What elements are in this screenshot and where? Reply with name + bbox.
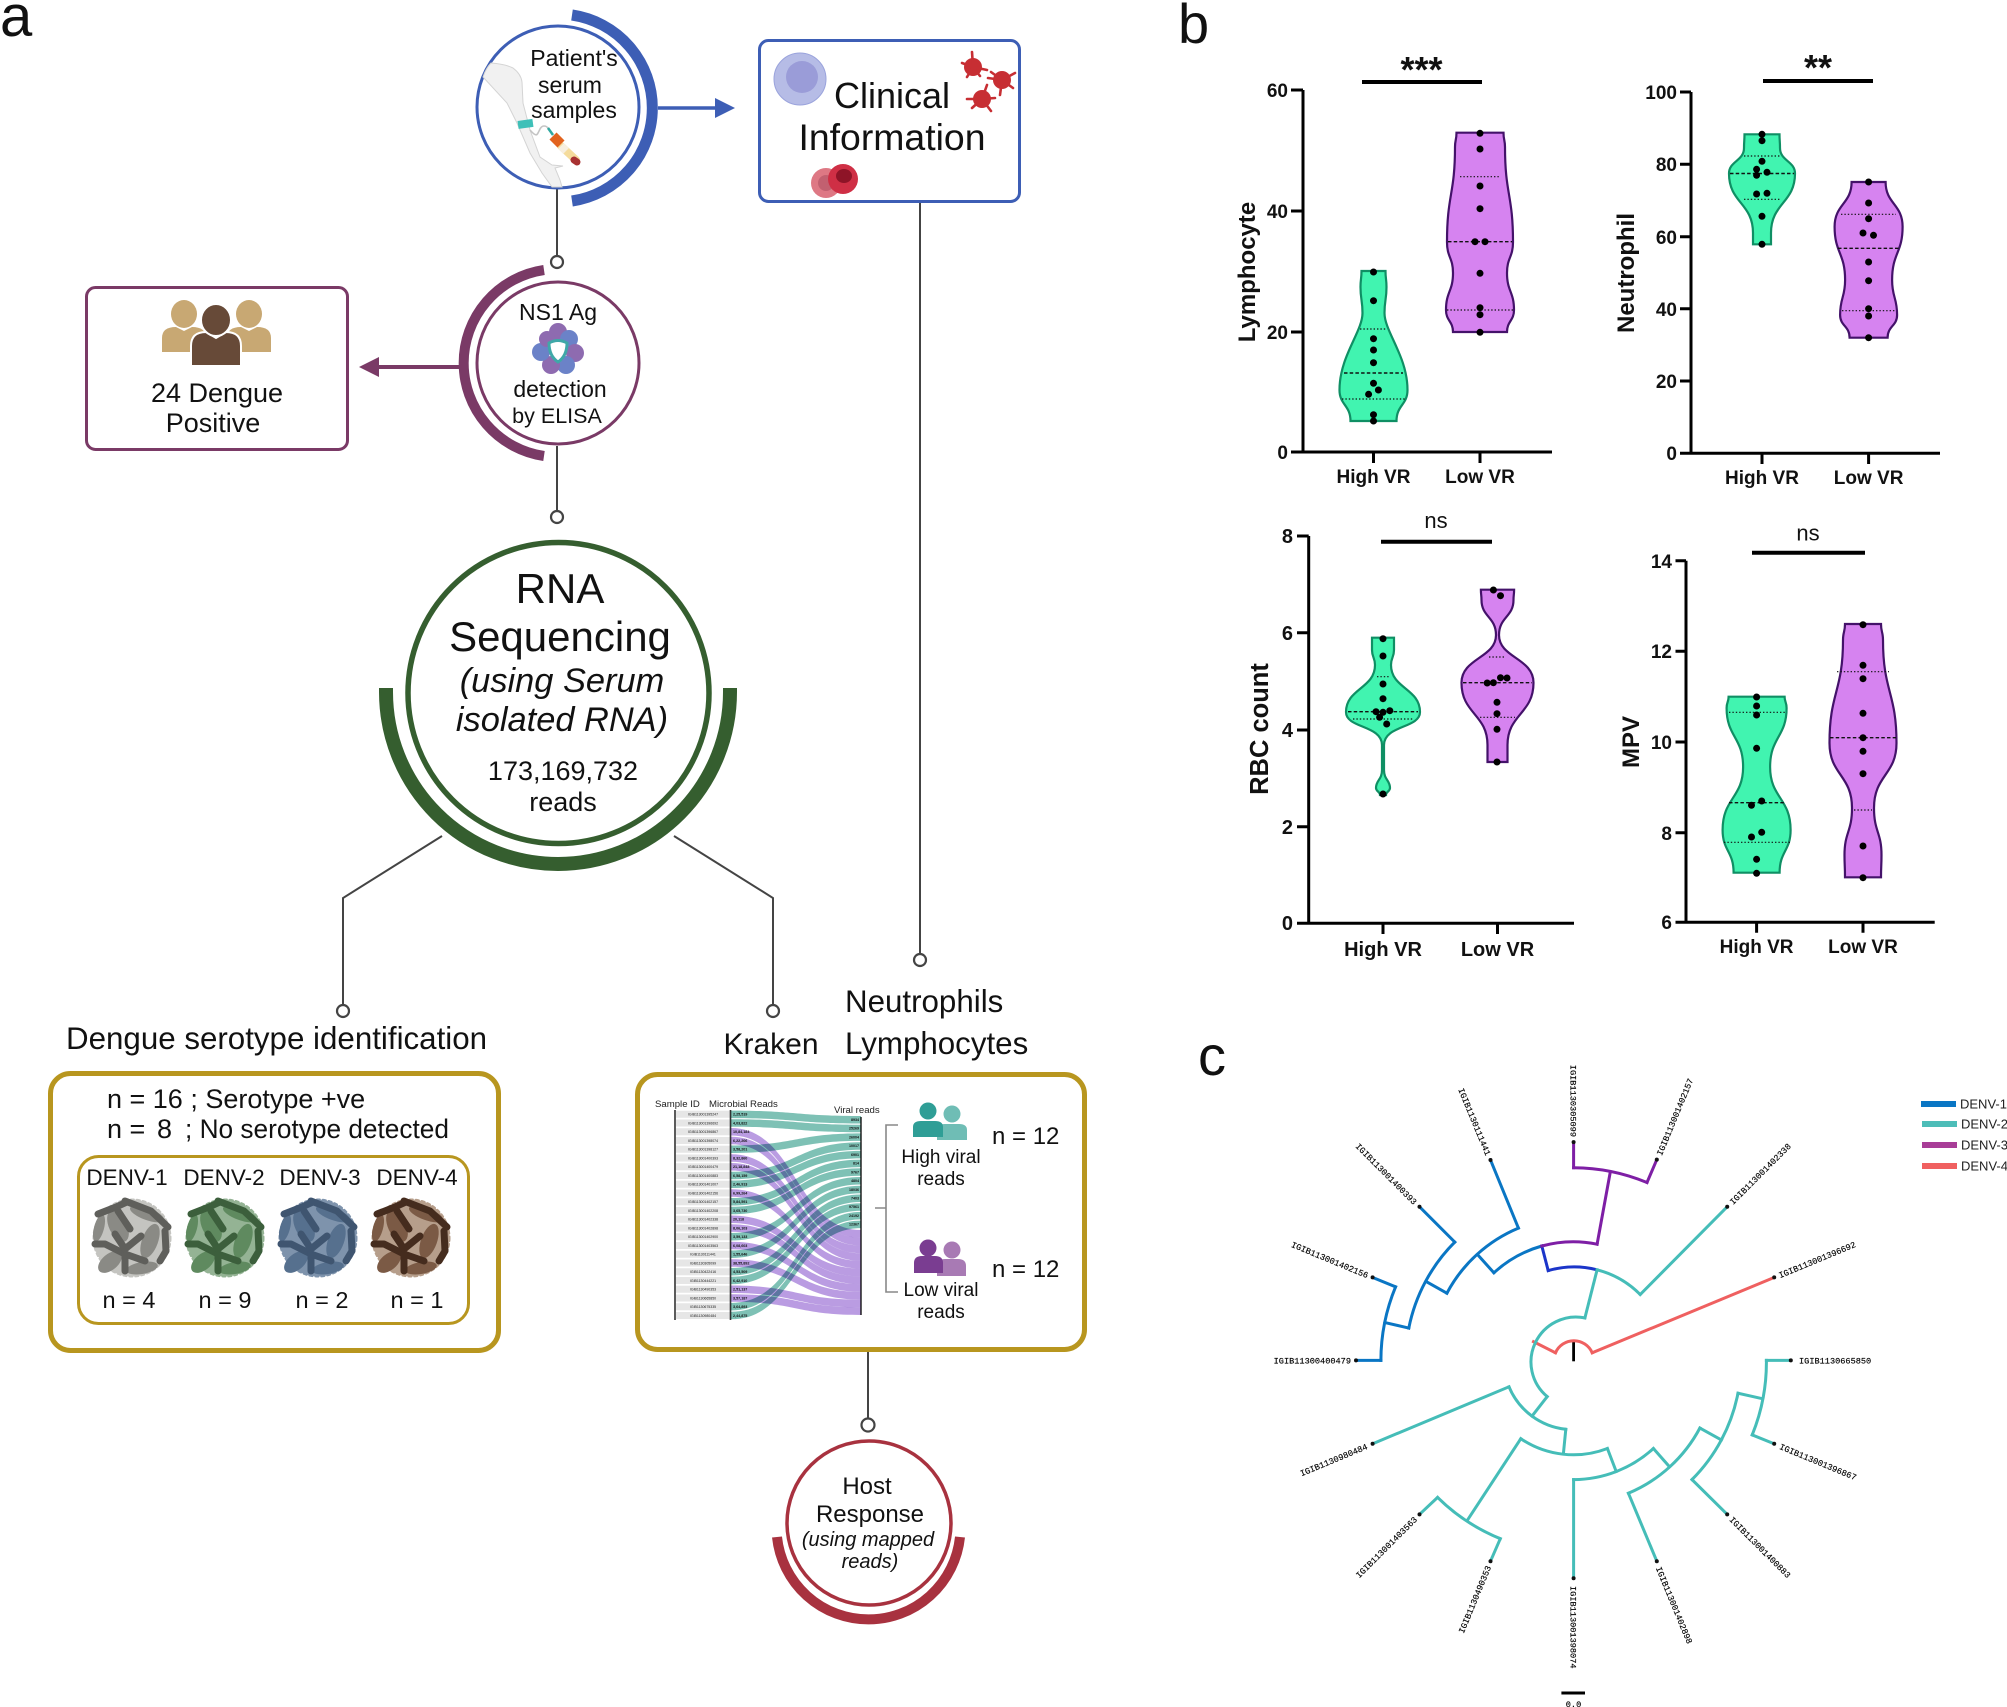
sankey chart: microbial to viral reads: 3,64,893 [733, 1305, 747, 1309]
clade: ancestral blue branches [1542, 1246, 1597, 1271]
clinical information box: Information [798, 116, 986, 158]
tip labels: IGIB1130665850 [1799, 1356, 1871, 1366]
sankey chart: microbial to viral reads: 9767 [851, 1170, 859, 1174]
violin chart: Lymphocyte: 0 [1277, 443, 1288, 464]
patient serum samples node: serum [538, 72, 602, 98]
violin chart: MPV: 6 [1661, 913, 1672, 934]
violin chart: MPV: Low VR [1828, 937, 1898, 958]
RNA sequencing node: isolated RNA) [456, 701, 668, 739]
Kraken panel [638, 1074, 1084, 1350]
sankey chart: microbial to viral reads: IGIB113001402338 [688, 1218, 718, 1222]
serotype panel: n = 16 ; Serotype +ve [107, 1084, 365, 1114]
icon: lymphocyte cell [774, 53, 826, 105]
sankey chart: microbial to viral reads: Viral reads [834, 1105, 880, 1116]
sankey chart: microbial to viral reads: IGIB113001402900 [688, 1235, 718, 1239]
violin chart: RBC count: RBC count [1246, 663, 1274, 795]
sankey chart: microbial to viral reads [655, 1099, 880, 1320]
sankey chart: microbial to viral reads: 2,46,913 [733, 1183, 747, 1187]
violin chart: Neutrophil: High VR [1725, 468, 1799, 489]
scale bar [1561, 1693, 1585, 1707]
icon: low viral reads people [914, 1240, 966, 1276]
violin chart: Neutrophil: 80 [1656, 155, 1677, 176]
sankey chart: microbial to viral reads: 10,84,184 [733, 1130, 750, 1134]
violin chart: Lymphocyte: 40 [1267, 202, 1288, 223]
serotype panel: DENV-3 [279, 1165, 361, 1190]
clade: DENV-3 [1542, 1142, 1657, 1246]
tip labels: IGIB113001398074 [1568, 1586, 1578, 1669]
violin chart: Lymphocyte [1234, 49, 1552, 488]
24 dengue positive box: 24 Dengue [151, 378, 283, 408]
tip labels: IGIB11300400479 [1274, 1356, 1351, 1366]
violin chart: Lymphocyte: 60 [1267, 81, 1288, 102]
sankey chart: microbial to viral reads: IGIB113001396867 [688, 1130, 718, 1134]
sankey chart: microbial to viral reads: IGIB1130444221 [690, 1279, 716, 1283]
sankey chart: microbial to viral reads: 6,42,910 [733, 1279, 747, 1283]
serotype panel: 8 [157, 1114, 172, 1144]
circular phylogenetic tree [1274, 1065, 1871, 1707]
clinical information box [760, 40, 1020, 202]
host response node: Response [816, 1501, 924, 1528]
sankey chart: microbial to viral reads: 18036 [849, 1188, 859, 1192]
serotype panel: ; No serotype detected [185, 1114, 449, 1144]
tip labels: IGIB1130111441 [1455, 1087, 1492, 1157]
sankey chart: microbial to viral reads: 4,53,509 [733, 1270, 747, 1274]
sankey chart: microbial to viral reads: 3,58,201 [733, 1148, 747, 1152]
violin chart: MPV: 10 [1651, 733, 1672, 754]
violin chart: Neutrophil [1613, 47, 1940, 489]
sankey chart: microbial to viral reads: 6,08,603 [733, 1244, 747, 1248]
icon: DENV-2 virion [184, 1200, 264, 1277]
legend: serotypes: DENV-4 [1961, 1158, 2007, 1174]
sankey chart: microbial to viral reads: IGIB113001402157 [688, 1200, 718, 1204]
violin chart: Neutrophil: 20 [1656, 372, 1677, 393]
sankey chart: microbial to viral reads: IGIB113001400883 [688, 1174, 718, 1178]
sankey chart: microbial to viral reads: IGIB113001400393 [688, 1156, 718, 1160]
Kraken panel: reads [917, 1169, 965, 1190]
tip labels: IGIB1130490353 [1457, 1564, 1494, 1635]
Kraken panel: Low viral [904, 1280, 978, 1301]
violin chart: MPV: 12 [1651, 642, 1672, 663]
sankey chart: microbial to viral reads: IGIB113001398074 [688, 1139, 718, 1143]
sankey chart: microbial to viral reads: IGIB1130422416 [690, 1270, 716, 1274]
connector: clinical information to neutrophils [914, 202, 926, 966]
icon: DENV-1 virion [91, 1200, 170, 1277]
violin chart: Neutrophil: Low VR [1834, 468, 1904, 489]
clade: DENV-2 [1373, 1207, 1791, 1578]
violin chart: RBC count: 8 [1282, 526, 1293, 548]
bracket [875, 1125, 898, 1292]
sankey chart: microbial to viral reads: IGIB1130111441 [690, 1253, 716, 1257]
legend: serotypes [1921, 1096, 2007, 1174]
sankey chart: microbial to viral reads: IGIB113001401007 [688, 1183, 718, 1187]
connector: NS1 to RNA sequencing [551, 446, 563, 523]
sankey chart: microbial to viral reads: 5,84,591 [733, 1200, 747, 1204]
serotype panel: n = 1 [391, 1287, 443, 1313]
sankey chart: microbial to viral reads: IGIB1130305099 [690, 1261, 716, 1265]
icon: arm with blood draw [483, 63, 577, 187]
serotype panel [50, 1074, 498, 1350]
sankey chart: microbial to viral reads: IGIB1130490353 [690, 1288, 716, 1292]
host response node: reads) [842, 1551, 898, 1573]
violin chart: Neutrophil: ** [1804, 47, 1832, 88]
serotype panel: DENV-1 [86, 1165, 168, 1190]
heading: Kraken: Kraken [723, 1028, 819, 1061]
sankey chart: microbial to viral reads: IGIB113001398127 [688, 1148, 718, 1152]
sankey chart: microbial to viral reads: Microbial Reads [709, 1099, 778, 1110]
violin chart: RBC count: High VR [1344, 939, 1422, 961]
clinical information box: Clinical [834, 75, 950, 116]
sankey chart: microbial to viral reads: 8,32,860 [733, 1156, 747, 1160]
sankey chart: microbial to viral reads: IGIB113001403563 [688, 1244, 718, 1248]
violin chart: MPV: 8 [1661, 824, 1672, 845]
sankey chart: microbial to viral reads: 3,65,730 [733, 1209, 747, 1213]
violin chart: RBC count: 0 [1282, 913, 1293, 935]
sankey chart: microbial to viral reads: 8934 [851, 1118, 859, 1122]
tip labels: IGIB113001400883 [1727, 1515, 1792, 1581]
sankey chart: microbial to viral reads: 6,99,264 [733, 1191, 748, 1195]
icon: red blood cells [811, 164, 858, 198]
serotype panel: DENV-2 [183, 1165, 265, 1190]
sankey chart: microbial to viral reads: 6901 [851, 1153, 859, 1157]
RNA sequencing node: RNA [516, 565, 604, 612]
violin chart: RBC count: 6 [1282, 623, 1293, 645]
24 dengue positive box [86, 288, 348, 450]
violin chart: MPV [1618, 521, 1935, 958]
tip labels: IGIB1130980484 [1299, 1442, 1369, 1479]
RNA sequencing node: Sequencing [449, 613, 671, 660]
serotype panel: DENV-4 [376, 1165, 458, 1190]
tip labels: IGIB113001400393 [1353, 1142, 1418, 1207]
tip labels [1274, 1065, 1871, 1669]
sankey chart: microbial to viral reads: 6,22,206 [733, 1139, 747, 1143]
tip labels: IGIB1130305099 [1568, 1065, 1578, 1137]
sankey chart: microbial to viral reads: IGIB113001402208 [688, 1209, 718, 1213]
violin chart: Neutrophil: 0 [1666, 444, 1677, 465]
Kraken panel: reads [917, 1302, 965, 1323]
icon: high viral reads people [913, 1102, 967, 1140]
clade: DENV-4 [1534, 1277, 1774, 1353]
sankey chart: microbial to viral reads: 24192 [849, 1214, 859, 1218]
violin chart: RBC count: Low VR [1461, 939, 1535, 961]
legend: serotypes: DENV-2 [1961, 1116, 2007, 1132]
tip labels: IGIB113001396867 [1778, 1442, 1858, 1483]
sankey chart: microbial to viral reads: 97561 [849, 1205, 859, 1209]
heading: neutrophils lymphocytes: Neutrophils [845, 984, 1003, 1019]
tip labels: IGIB113001402898 [1653, 1565, 1694, 1646]
legend: serotypes: DENV-3 [1961, 1138, 2007, 1152]
NS1 Ag ELISA node [464, 270, 639, 456]
violin chart: MPV: High VR [1720, 937, 1794, 958]
Kraken panel: n = 12 [992, 1123, 1059, 1150]
serotype panel: n = 9 [199, 1287, 251, 1313]
sankey chart: microbial to viral reads: 20,118 [733, 1218, 744, 1222]
24 dengue positive box: Positive [166, 408, 260, 438]
patient serum samples node: samples [531, 97, 617, 123]
Kraken panel: High viral [901, 1147, 981, 1168]
tip labels: IGIB113001403563 [1354, 1515, 1420, 1581]
panel label c: c [1198, 1024, 1226, 1087]
connector: patient to NS1 [551, 189, 563, 268]
violin chart: RBC count: ns [1424, 508, 1448, 533]
icon: people group [162, 300, 271, 366]
sankey chart: microbial to viral reads: 3,59,133 [733, 1235, 747, 1239]
violin chart: MPV: MPV [1618, 716, 1645, 768]
sankey chart: microbial to viral reads: IGIB113001402898 [688, 1226, 718, 1230]
icon: platelets [962, 52, 1015, 111]
violin chart: RBC count [1246, 508, 1574, 961]
tip labels: IGIB113001402338 [1728, 1142, 1794, 1207]
icon: NS1 protein [532, 323, 584, 374]
sankey chart: microbial to viral reads: 8,06,103 [733, 1226, 747, 1230]
sankey chart: microbial to viral reads: IGIB113001396692 [688, 1121, 718, 1125]
sankey chart: microbial to viral reads: IGIB1130980484 [690, 1314, 716, 1318]
serotype panel: n = [107, 1114, 145, 1144]
sankey chart: microbial to viral reads: Sample ID [655, 1099, 700, 1110]
sankey chart: microbial to viral reads: IGIB113001402156 [688, 1191, 718, 1195]
host response node: Host [842, 1473, 892, 1500]
violin chart: Lymphocyte: Low VR [1445, 467, 1515, 488]
heading: dengue serotype identification: Dengue serotype identification [66, 1021, 487, 1056]
sankey chart: microbial to viral reads: 2,51,137 [733, 1288, 747, 1292]
sankey chart: microbial to viral reads: 4,03,822 [733, 1121, 747, 1125]
Kraken panel: n = 12 [992, 1256, 1059, 1283]
RNA sequencing node: reads [529, 787, 597, 817]
tip labels: IGIB113001396692 [1777, 1240, 1858, 1281]
violin chart: RBC count: 2 [1282, 817, 1293, 839]
RNA sequencing node: 173,169,732 [488, 756, 638, 786]
sankey chart: microbial to viral reads: 21,18,848 [733, 1165, 749, 1169]
RNA sequencing node [386, 542, 730, 864]
connector: RNA to serotype [337, 836, 442, 1017]
arrow: NS1 to dengue positive [359, 357, 459, 377]
tip labels: IGIB113001402157 [1655, 1077, 1696, 1157]
sankey chart: microbial to viral reads: 814 [853, 1162, 859, 1166]
tree root [1572, 1340, 1575, 1361]
sankey chart: microbial to viral reads: 4804 [851, 1179, 859, 1183]
violin chart: MPV: 14 [1651, 552, 1672, 573]
NS1 Ag ELISA node: detection [513, 376, 607, 402]
sankey chart: microbial to viral reads: 2,44,875 [733, 1314, 747, 1318]
sankey chart: microbial to viral reads: 38,55,892 [733, 1261, 749, 1265]
serotype panel: n = 4 [103, 1287, 155, 1313]
violin chart: Lymphocyte: 20 [1267, 323, 1288, 344]
clade: DENV-1 [1356, 1160, 1542, 1360]
violin chart: Neutrophil: 100 [1645, 83, 1677, 104]
sankey chart: microbial to viral reads: 7403 [851, 1196, 859, 1200]
NS1 Ag ELISA node: by ELISA [512, 404, 602, 428]
violin chart: Neutrophil: 60 [1656, 228, 1677, 249]
heading: neutrophils lymphocytes: Lymphocytes [845, 1026, 1028, 1061]
connector: RNA to Kraken [674, 836, 779, 1017]
patient serum samples node [477, 15, 652, 201]
serotype panel: n = 2 [296, 1287, 348, 1313]
violin chart: Neutrophil: 40 [1656, 300, 1677, 321]
icon: DENV-3 virion [277, 1200, 356, 1277]
heading: neutrophils lymphocytes [845, 984, 1028, 1061]
icon: DENV-4 virion [370, 1200, 450, 1277]
NS1 Ag ELISA node: NS1 Ag [519, 299, 597, 325]
sankey chart: microbial to viral reads: 1,55,646 [733, 1253, 747, 1257]
violin chart: RBC count: 4 [1282, 720, 1294, 742]
violin chart: Lymphocyte: High VR [1337, 467, 1411, 488]
sankey chart: microbial to viral reads: 3,57,187 [733, 1296, 747, 1300]
sankey chart: microbial to viral reads: IGIB1130665850 [690, 1296, 716, 1300]
arrow: patient to clinical [658, 98, 735, 118]
tip labels: IGIB113001402156 [1289, 1240, 1370, 1281]
host response node [777, 1441, 960, 1619]
RNA sequencing node: (using Serum [460, 662, 664, 700]
host response node: (using mapped [802, 1529, 935, 1551]
tip markers [1354, 1140, 1793, 1580]
violin chart: Lymphocyte: *** [1400, 49, 1443, 90]
connector: Kraken to host response [862, 1350, 874, 1432]
violin chart: Lymphocyte: Lymphocyte [1234, 202, 1261, 342]
violin chart: MPV: ns [1796, 521, 1820, 546]
patient serum samples node: Patient's [530, 45, 618, 71]
sankey chart: microbial to viral reads: 6,58,159 [733, 1174, 747, 1178]
sankey chart: microbial to viral reads: 12367 [849, 1223, 859, 1227]
legend: serotypes: DENV-1 [1960, 1096, 2007, 1112]
sankey chart: microbial to viral reads: IGIB1130675335 [690, 1305, 716, 1309]
sankey chart: microbial to viral reads: IGIB113001400479 [688, 1165, 718, 1169]
sankey chart: microbial to viral reads: 10017 [849, 1144, 859, 1148]
sankey chart: microbial to viral reads: 26004 [849, 1135, 859, 1139]
sankey chart: microbial to viral reads: 2,25,519 [733, 1113, 747, 1117]
violin chart: Neutrophil: Neutrophil [1613, 213, 1640, 333]
sankey chart: microbial to viral reads: IGIB113001395247 [688, 1113, 718, 1117]
sankey chart: microbial to viral reads: 25269 [849, 1127, 859, 1131]
